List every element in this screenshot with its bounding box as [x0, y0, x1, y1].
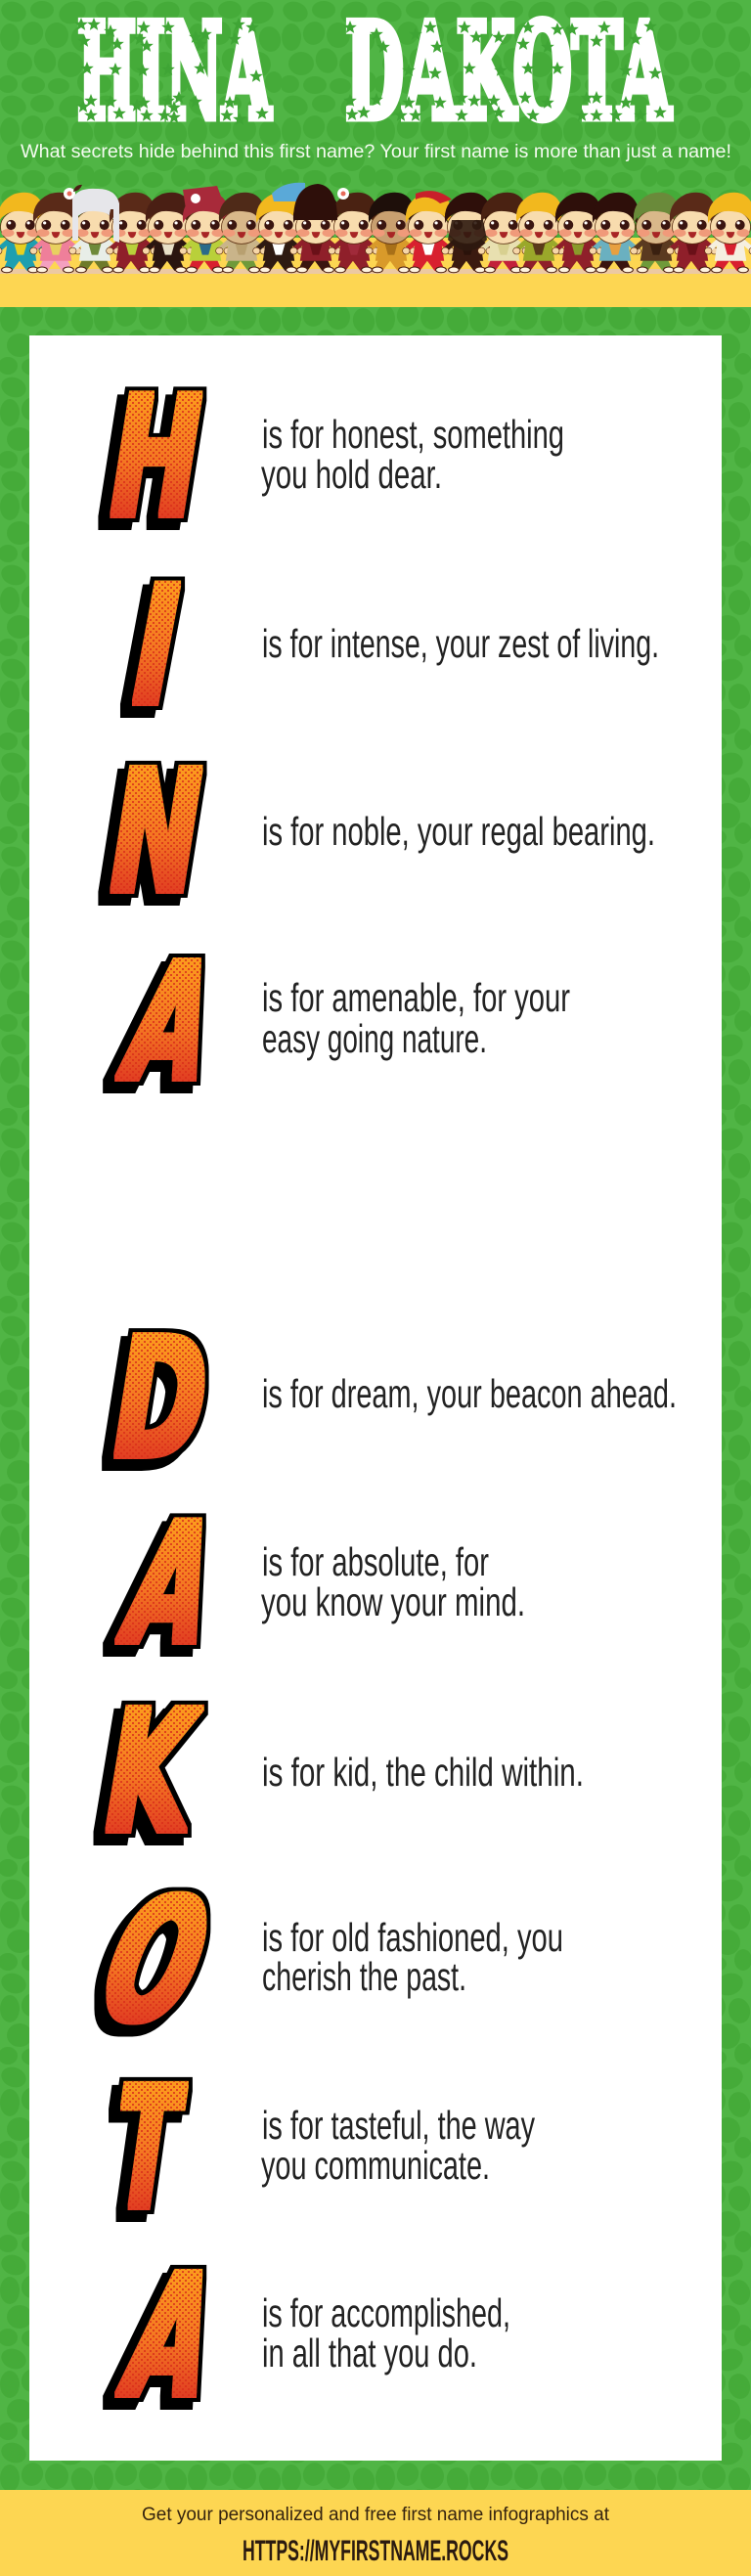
text: old fashioned: cherish the past.	[262, 1954, 466, 1999]
entry: O	[74, 1863, 563, 2060]
header title	[74, 0, 672, 149]
text: old fashioned	[262, 1915, 563, 1999]
letter H: H	[97, 361, 214, 555]
text: absolute: you know your mind.	[261, 1579, 525, 1624]
letter A: A	[106, 1488, 236, 1682]
entry: D	[100, 1304, 677, 1496]
letter K: K	[91, 1673, 211, 1871]
letter A: A	[107, 929, 234, 1118]
letter I: I	[117, 552, 195, 743]
entry: A	[106, 1488, 525, 1682]
text: accomplished: is for accomplished,	[262, 2290, 510, 2335]
letter N: N	[97, 735, 215, 932]
entry: A	[107, 929, 570, 1118]
white content panel	[29, 335, 722, 2461]
text: tasteful	[261, 2103, 535, 2188]
text: old fashioned: is for old fashioned, you	[262, 1915, 563, 1960]
entry: K	[91, 1673, 584, 1871]
text: accomplished: in all that you do.	[262, 2331, 477, 2376]
subtitle: What secrets hide behind this first name? Your first name is more than just a name!	[21, 142, 731, 162]
text: absolute	[261, 1539, 525, 1624]
entry: I	[117, 552, 659, 743]
entry: N	[97, 735, 655, 932]
text: accomplished	[262, 2290, 510, 2376]
entry: T	[104, 2050, 535, 2247]
text: tasteful: is for tasteful, the way	[262, 2103, 535, 2148]
footer text: Get your personalized and free first name infographics at	[142, 2505, 610, 2525]
row of cartoon children	[0, 183, 751, 273]
letter O: O	[74, 1863, 236, 2060]
entry: A	[106, 2240, 510, 2436]
text: amenable: easy going nature.	[262, 1016, 487, 1061]
text: honest: you hold dear.	[261, 452, 442, 497]
letter A: A	[106, 2240, 236, 2436]
text: kid: is for kid, the child within.	[262, 1750, 584, 1795]
text: amenable	[262, 975, 570, 1061]
footer band	[0, 2490, 751, 2576]
yellow ground band	[0, 238, 751, 307]
text: amenable: is for amenable, for your	[262, 975, 570, 1020]
letter T: T	[104, 2050, 191, 2247]
text: honest	[261, 412, 564, 497]
letter D: D	[100, 1304, 221, 1496]
text: honest: is for honest, something	[262, 412, 564, 457]
entry: H	[97, 361, 564, 555]
footer url: HTTPS://MYFIRSTNAME.ROCKS	[243, 2535, 508, 2567]
text: absolute: is for absolute, for	[262, 1539, 489, 1584]
text: tasteful: you communicate.	[261, 2143, 490, 2188]
